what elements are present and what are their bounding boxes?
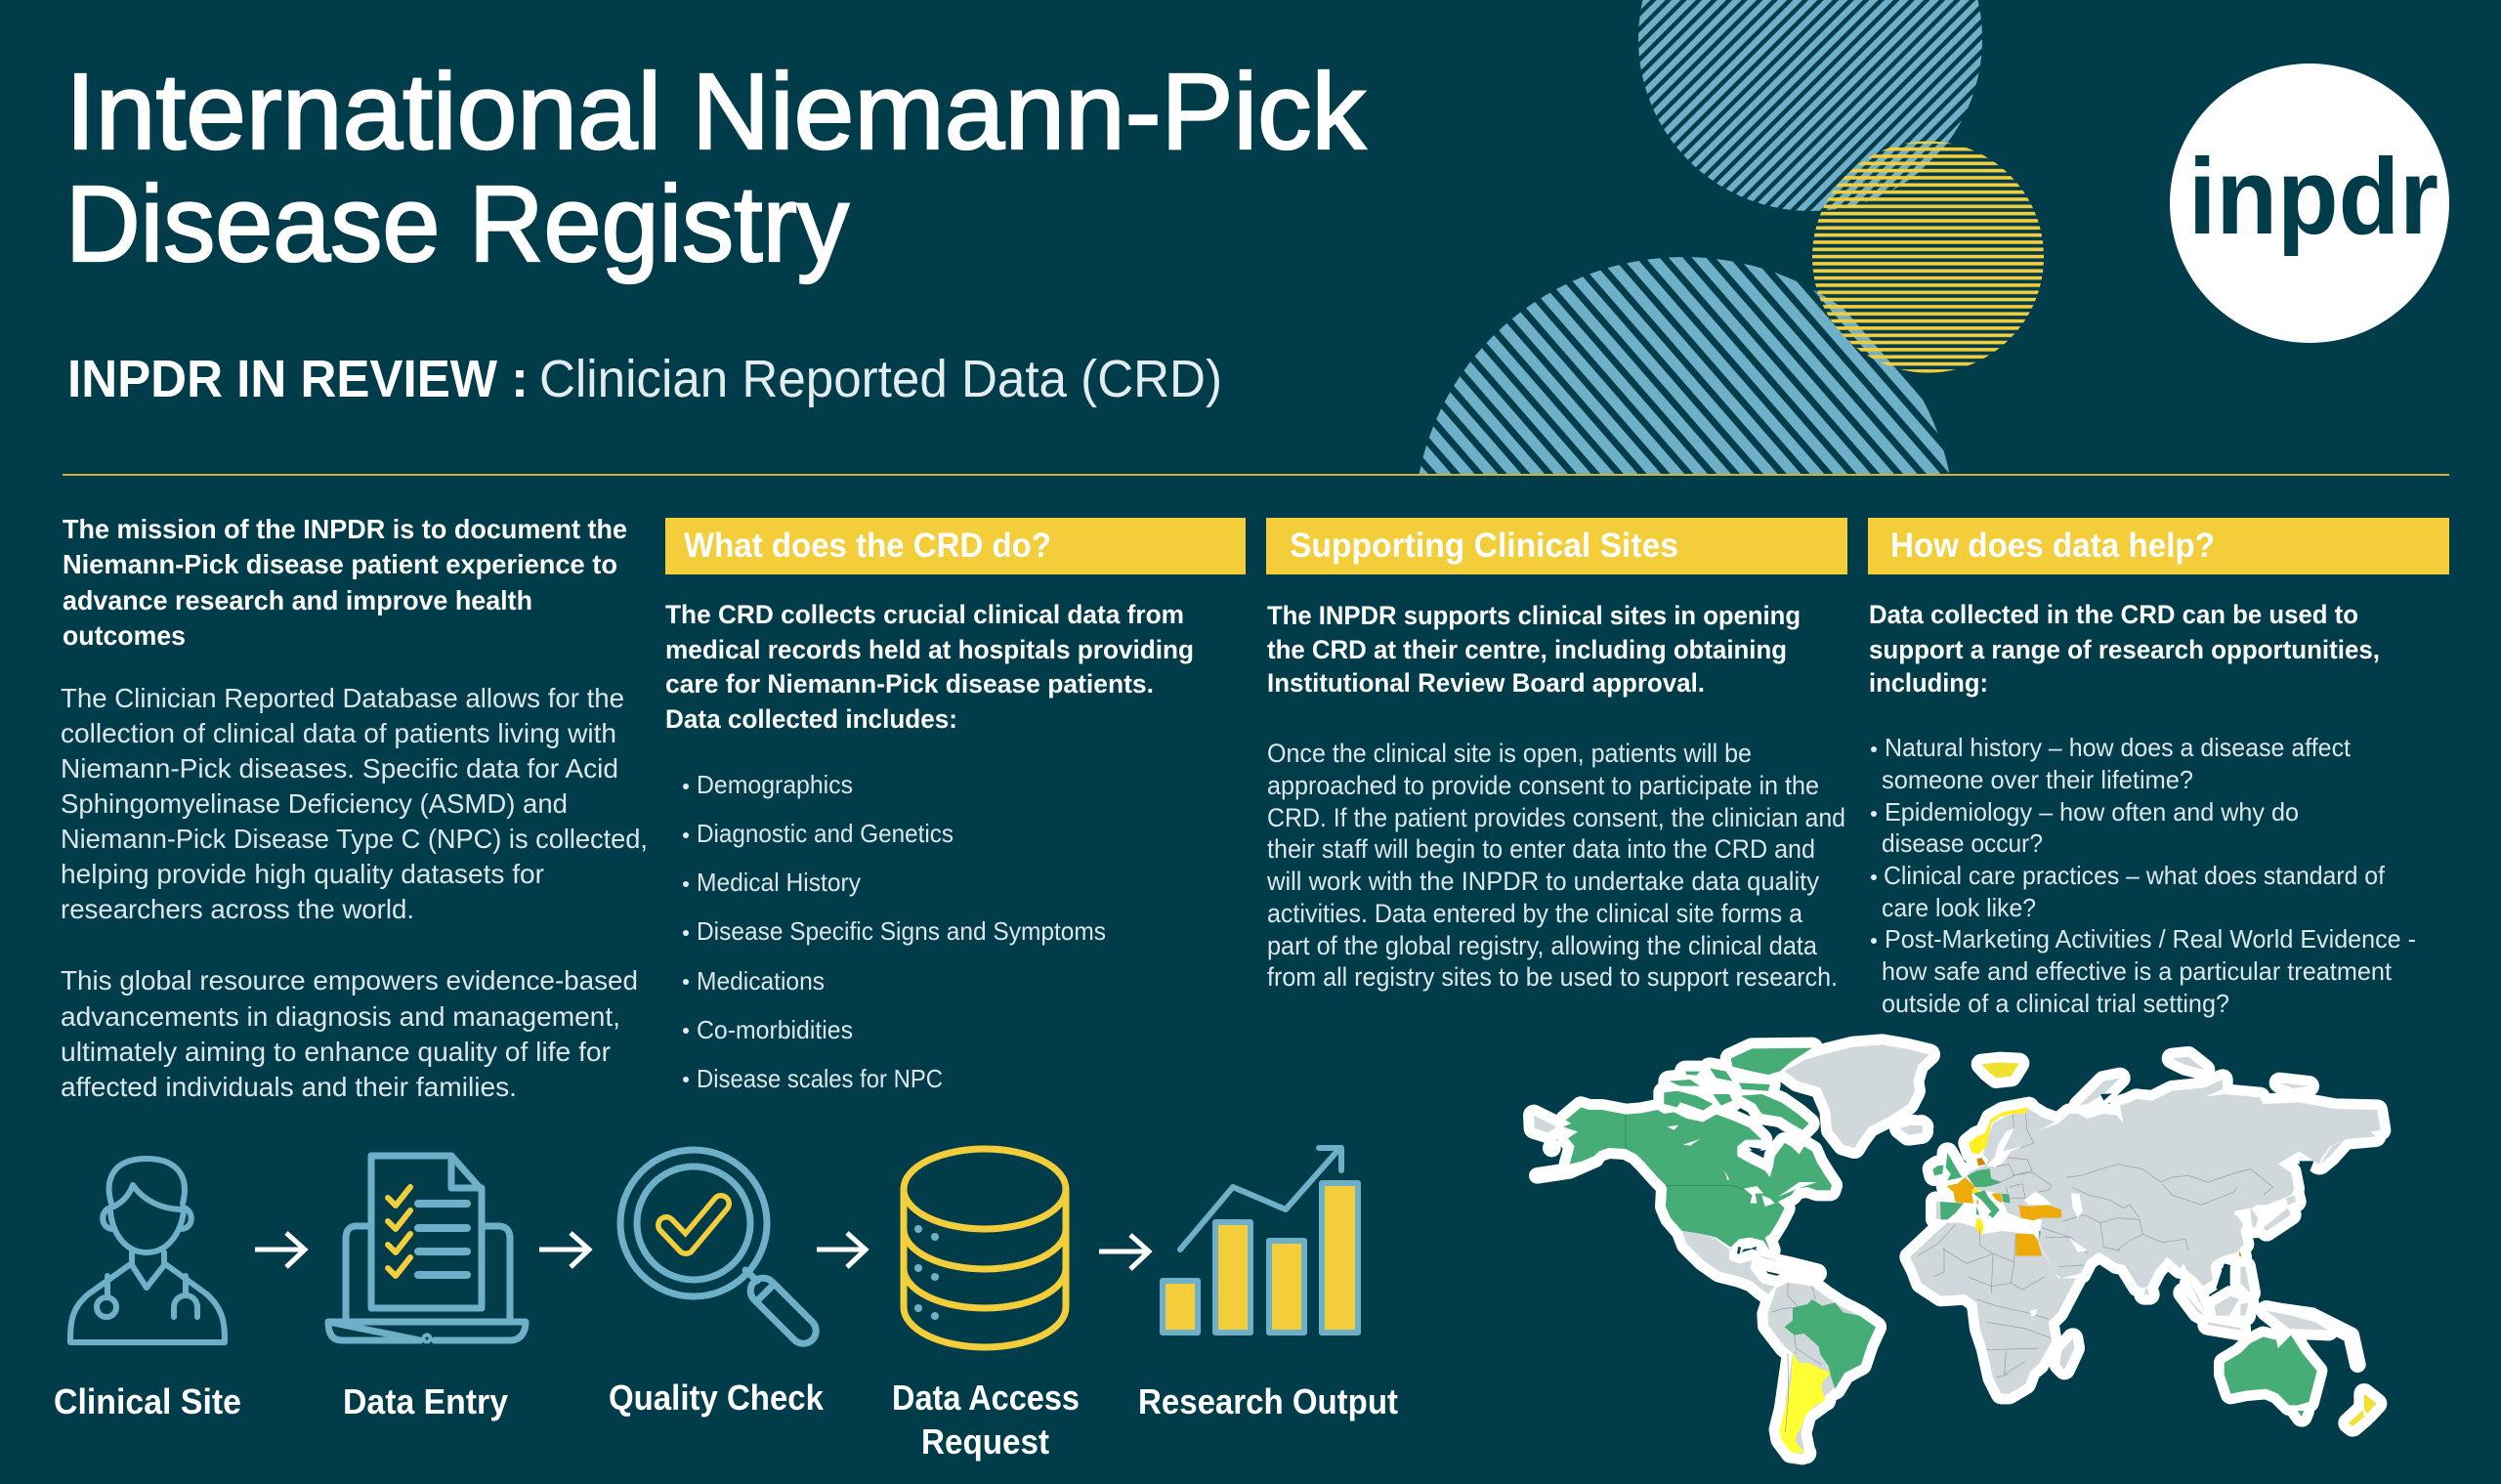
CRD intro text: medical records held at hospitals providing bbox=[665, 635, 1194, 664]
research opportunities list: Clinical care practices – what does standard of bbox=[1884, 861, 2386, 890]
column 1: mission statement: The mission of the INPDR is to document the bbox=[63, 514, 627, 544]
flow labels: Quality Check bbox=[609, 1378, 825, 1418]
supporting intro text bbox=[1267, 601, 1801, 698]
world map bbox=[1534, 1044, 2381, 1454]
map: Europe, Africa, Asia and Oceania bbox=[1902, 1057, 2381, 1426]
arrow: data entry to quality check bbox=[539, 1233, 589, 1267]
supporting body text: Once the clinical site is open, patients will be bbox=[1267, 739, 1752, 768]
heading bar: How does data help?: How does data help? bbox=[1890, 527, 2215, 565]
data help intro text: support a range of research opportunities, bbox=[1869, 635, 2380, 664]
column 1: global resource: This global resource empowers evidence-based bbox=[61, 965, 638, 996]
data collected list: Medical History bbox=[697, 868, 861, 897]
column 1: global resource: affected individuals and their families. bbox=[61, 1072, 517, 1102]
column 1: database description: helping provide high quality datasets for bbox=[61, 859, 544, 889]
heading bar: What does the CRD do? bbox=[665, 518, 1246, 574]
flow labels bbox=[54, 1378, 1398, 1462]
supporting intro text: Institutional Review Board approval. bbox=[1267, 668, 1705, 698]
research opportunities list: how safe and effective is a particular treatment bbox=[1882, 956, 2393, 986]
icon: clinical site doctor bbox=[70, 1159, 225, 1342]
panel: supporting clinical sites bbox=[1266, 518, 1847, 992]
supporting body text: from all registry sites to be used to support research. bbox=[1267, 962, 1838, 992]
supporting body text: approached to provide consent to participate in the bbox=[1267, 771, 1819, 800]
research opportunities list: disease occur? bbox=[1882, 828, 2043, 858]
column 1: mission statement bbox=[63, 514, 627, 651]
column 1: global resource bbox=[61, 965, 638, 1102]
research opportunities list: outside of a clinical trial setting? bbox=[1882, 989, 2229, 1018]
heading bar: How does data help? bbox=[1868, 518, 2449, 574]
data help intro text: Data collected in the CRD can be used to bbox=[1869, 600, 2358, 629]
logo: inpdr: inpdr bbox=[2188, 137, 2438, 257]
supporting intro text: The INPDR supports clinical sites in opening bbox=[1267, 601, 1801, 630]
data collected list: Demographics bbox=[697, 770, 853, 799]
heading bar: Supporting Clinical Sites: Supporting Clinical Sites bbox=[1290, 527, 1678, 565]
data collected list: Diagnostic and Genetics bbox=[697, 819, 954, 848]
arrow: clinical site to data entry bbox=[255, 1233, 305, 1267]
research opportunities list: Natural history – how does a disease affect bbox=[1885, 733, 2352, 762]
data help intro text: including: bbox=[1869, 668, 1988, 698]
column 1: mission statement: advance research and improve health bbox=[63, 585, 532, 615]
CRD intro text bbox=[665, 600, 1194, 734]
subtitle: : bbox=[511, 350, 529, 408]
CRD intro text: The CRD collects crucial clinical data from bbox=[665, 600, 1184, 629]
column 1: database description bbox=[61, 683, 648, 924]
title: Disease Registry bbox=[65, 164, 849, 284]
flow labels: Data Access bbox=[892, 1378, 1080, 1418]
flow labels: Request bbox=[921, 1421, 1049, 1462]
research opportunities list: Epidemiology – how often and why do bbox=[1885, 797, 2299, 827]
column 1: global resource: advancements in diagnosis and management, bbox=[61, 1001, 620, 1032]
flow labels: Clinical Site bbox=[54, 1381, 241, 1421]
research opportunities list: someone over their lifetime? bbox=[1882, 765, 2193, 794]
CRD intro text: care for Niemann-Pick disease patients. bbox=[665, 669, 1154, 699]
column 1: database description: researchers across the world. bbox=[61, 894, 414, 924]
decorative striped circles bbox=[1414, 0, 2044, 798]
supporting body text: CRD. If the patient provides consent, the clinician and bbox=[1267, 803, 1845, 832]
column 1: database description: The Clinician Reported Database allows for the bbox=[61, 683, 624, 713]
data help intro text bbox=[1869, 600, 2380, 698]
icon: research output bar chart bbox=[1163, 1148, 1358, 1333]
supporting body text: activities. Data entered by the clinical site forms a bbox=[1267, 899, 1802, 928]
subtitle: INPDR IN REVIEW bbox=[67, 350, 497, 408]
data collected list: Co-morbidities bbox=[697, 1015, 853, 1044]
column 1: global resource: ultimately aiming to enhance quality of life for bbox=[61, 1037, 611, 1067]
column 1: database description: collection of clinical data of patients living with bbox=[61, 718, 616, 748]
data collected list bbox=[683, 770, 1106, 1093]
column 1: database description: Niemann-Pick Disease Type C (NPC) is collected, bbox=[61, 824, 648, 854]
column 1: mission statement: outcomes bbox=[63, 620, 186, 651]
column 1: database description: Niemann-Pick diseases. Specific data for Acid bbox=[61, 753, 618, 784]
data collected list: Disease Specific Signs and Symptoms bbox=[697, 916, 1106, 946]
research opportunities list bbox=[1871, 733, 2416, 1018]
supporting body text: will work with the INPDR to undertake data quality bbox=[1266, 867, 1820, 896]
icon: data entry laptop bbox=[328, 1156, 526, 1340]
research opportunities list: Post-Marketing Activities / Real World Evidence - bbox=[1885, 924, 2416, 954]
panel: what does the CRD do bbox=[665, 518, 1246, 1093]
arrow: quality check to data access bbox=[817, 1233, 866, 1267]
flow labels: Research Output bbox=[1138, 1381, 1398, 1421]
arrow: data access to research output bbox=[1099, 1235, 1149, 1269]
heading bar: What does the CRD do?: What does the CRD do? bbox=[684, 527, 1051, 565]
map: Americas bbox=[1534, 1044, 1929, 1454]
title bbox=[65, 52, 1367, 284]
supporting body text: their staff will begin to enter data into the CRD and bbox=[1267, 834, 1815, 864]
subtitle: Clinician Reported Data (CRD) bbox=[539, 350, 1222, 408]
research opportunities list: care look like? bbox=[1882, 893, 2036, 922]
heading bar: Supporting Clinical Sites bbox=[1266, 518, 1847, 574]
supporting intro text: the CRD at their centre, including obtaining bbox=[1267, 635, 1787, 664]
logo: inpdr bbox=[2170, 64, 2449, 343]
supporting body text bbox=[1266, 739, 1845, 992]
supporting body text: part of the global registry, allowing the clinical data bbox=[1267, 931, 1817, 960]
flow labels: Data Entry bbox=[343, 1381, 508, 1421]
column 1: database description: Sphingomyelinase Deficiency (ASMD) and bbox=[61, 788, 568, 819]
panel: how does data help bbox=[1868, 518, 2449, 1018]
icon: quality check magnifier bbox=[620, 1150, 822, 1349]
column 1: mission statement: Niemann-Pick disease patient experience to bbox=[63, 549, 617, 579]
data collected list: Disease scales for NPC bbox=[697, 1064, 943, 1093]
data collected list: Medications bbox=[697, 966, 825, 996]
icon: data access database bbox=[904, 1149, 1066, 1347]
title: International Niemann-Pick bbox=[65, 52, 1367, 172]
CRD intro text: Data collected includes: bbox=[665, 704, 957, 734]
subtitle bbox=[67, 350, 1222, 408]
